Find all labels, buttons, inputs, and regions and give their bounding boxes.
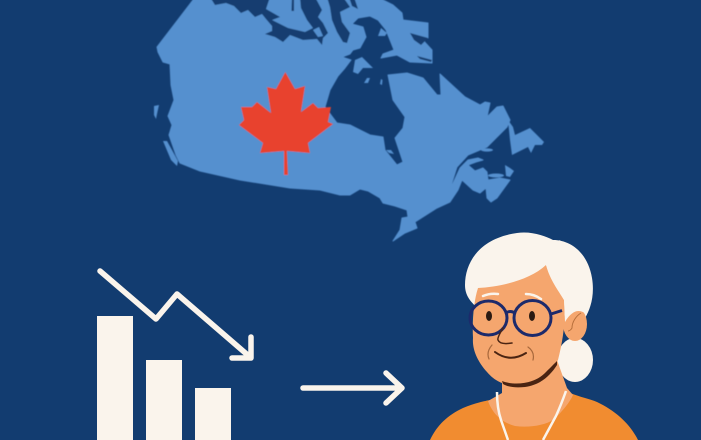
map: Baffin inlets: [410, 33, 432, 62]
nose: [498, 328, 512, 344]
map: Southampton Island: [353, 57, 373, 74]
icon: maple leaf: [239, 72, 333, 175]
map: mainland and arctic: [157, 0, 510, 241]
map: Vancouver Island: [163, 141, 178, 166]
map: small Hudson islands: [364, 78, 382, 85]
eyebrows: [483, 294, 541, 299]
face: [473, 265, 565, 386]
map of Canada: [154, 0, 544, 241]
ear: [563, 307, 587, 341]
map: arctic channel east: [292, 0, 358, 43]
orange top: [430, 393, 638, 440]
hair back: [465, 233, 593, 330]
eyes: [486, 311, 535, 321]
neck: [488, 360, 573, 427]
map: Newfoundland: [508, 120, 544, 155]
map: Foxe Basin island: [378, 28, 387, 36]
map: Haida Gwaii: [154, 105, 159, 119]
cheek lines: [488, 345, 533, 360]
bar chart with declining trend: [97, 271, 251, 440]
bar 2: [146, 360, 182, 440]
map: James Bay island: [386, 150, 394, 154]
map: arctic channel west: [210, 0, 328, 45]
smile: [495, 352, 526, 358]
hair bun: [557, 338, 593, 382]
hair side sweep: [546, 240, 587, 322]
arrow: declining trend: [100, 271, 251, 358]
glasses: [470, 300, 562, 336]
chin shadow: [502, 361, 557, 387]
bar 3: [195, 388, 231, 440]
map: Anticosti Island: [481, 148, 493, 152]
necklace: [497, 391, 566, 440]
illustration: elderly woman: [430, 233, 638, 440]
arrow: to the right: [303, 373, 402, 403]
bar 1: [97, 316, 133, 440]
map: Prince Edward Island: [488, 174, 504, 178]
map: arctic island: [313, 27, 323, 37]
map: Cape Breton: [505, 165, 514, 177]
ear line: [568, 313, 581, 331]
